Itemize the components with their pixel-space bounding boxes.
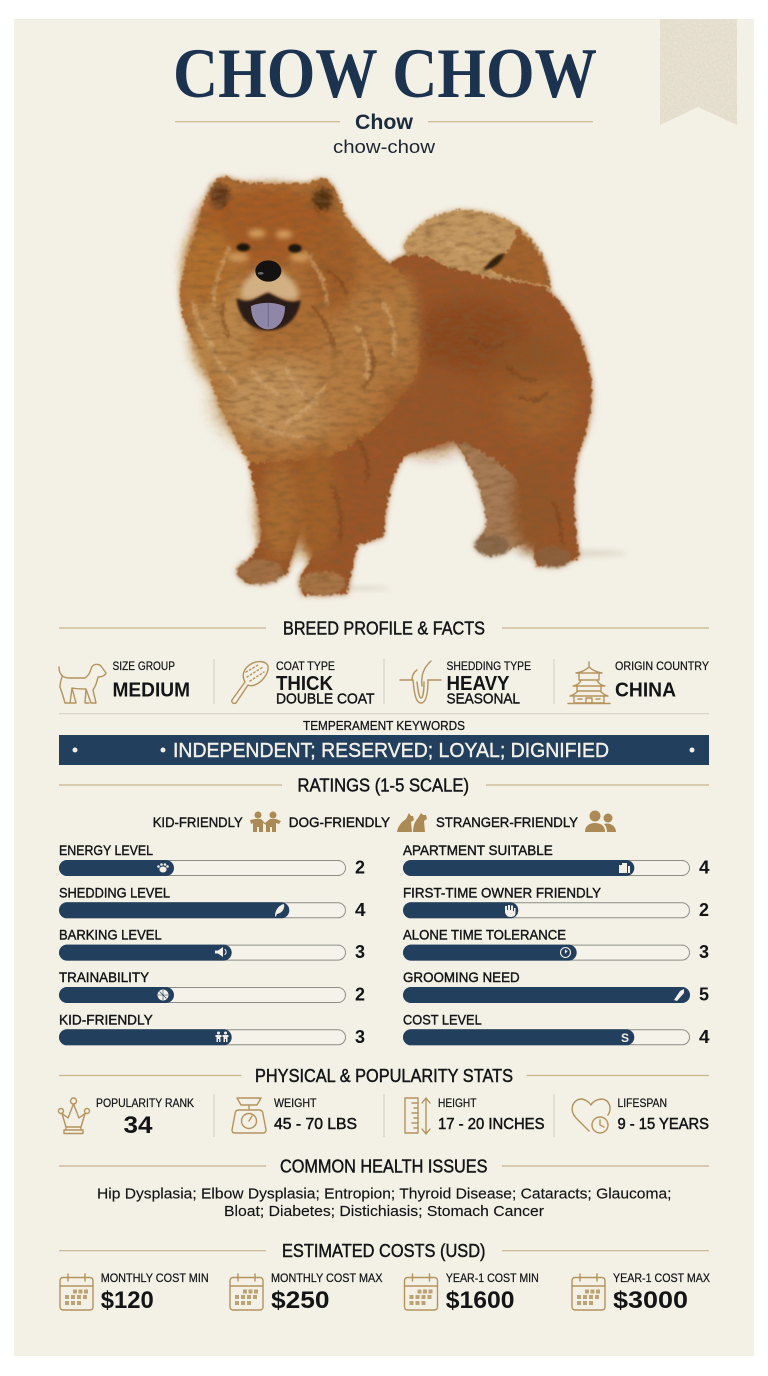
rating: alone time tolerance (403, 927, 709, 962)
rating: grooming need (403, 969, 709, 1004)
rating: alone time tolerance: ALONE TIME TOLERANCE (403, 927, 566, 943)
cost: monthly max: MONTHLY COST MAX (271, 1271, 382, 1285)
rating: cost level: COST LEVEL (403, 1011, 482, 1027)
section heading: health issues: COMMON HEALTH ISSUES (280, 1156, 488, 1176)
icon: heart and clock (572, 1099, 610, 1133)
icon: scale (232, 1098, 266, 1133)
fact: shedding type (400, 659, 531, 708)
cost: year-1 max: YEAR-1 COST MAX (613, 1271, 710, 1285)
ratings legend: KID-FRIENDLY (153, 814, 243, 830)
icon: dog (59, 664, 106, 703)
rating: trainability (59, 969, 365, 1004)
stat: lifespan: 9 - 15 YEARS (618, 1116, 709, 1133)
icon: dogs (397, 813, 427, 832)
cost: monthly max (230, 1271, 382, 1314)
stat: popularity rank: 34 (124, 1112, 153, 1139)
icon: speaker (215, 947, 226, 957)
bookmark ribbon (660, 19, 737, 125)
icon: kids (250, 812, 281, 832)
icon: people (585, 810, 616, 832)
rating: shedding level: 4 (355, 900, 366, 920)
stat: height (405, 1096, 544, 1134)
rating: apartment suitable: 4 (699, 858, 710, 878)
fact: size group (59, 659, 190, 703)
icon: hair follicle (400, 661, 441, 703)
stat: weight: 45 - 70 LBS (274, 1116, 357, 1133)
rating: first-time owner friendly: FIRST-TIME OWNER FRIENDLY (403, 884, 602, 900)
section heading: breed profile: BREED PROFILE & FACTS (283, 618, 485, 638)
cost: monthly max: $250 (271, 1287, 330, 1314)
fact: origin country: ORIGIN COUNTRY (615, 659, 709, 673)
rating: cost level: 4 (699, 1027, 710, 1047)
rating: kid-friendly: 3 (355, 1027, 365, 1047)
icon: kids (216, 1032, 228, 1042)
cost: year-1 min (404, 1271, 539, 1314)
rating: grooming need: GROOMING NEED (403, 969, 520, 985)
stat: height: HEIGHT (438, 1096, 477, 1110)
stat: lifespan (572, 1096, 709, 1133)
rating: barking level: 3 (355, 942, 365, 962)
icon: brain (158, 990, 168, 1000)
icon: crown (58, 1098, 90, 1134)
stat: popularity rank (58, 1096, 194, 1139)
cost: year-1 max (572, 1271, 710, 1314)
dog photo illustration (180, 177, 627, 595)
fact: coat type (232, 659, 375, 708)
stat: lifespan: LIFESPAN (618, 1096, 667, 1110)
rating: kid-friendly: KID-FRIENDLY (59, 1011, 153, 1027)
health issues text: Bloat; Diabetes; Distichiasis; Stomach Cancer (224, 1203, 544, 1220)
rating: shedding level: SHEDDING LEVEL (59, 884, 170, 900)
subtitle: common name: Chow (355, 111, 414, 134)
rating: energy level (59, 842, 365, 878)
temperament banner (59, 735, 709, 765)
icon: dollar: S (621, 1031, 629, 1045)
stat: height: 17 - 20 INCHES (438, 1116, 544, 1133)
rating: barking level: BARKING LEVEL (59, 927, 162, 943)
rating: first-time owner friendly: 2 (699, 900, 709, 920)
rating: cost level (403, 1011, 710, 1047)
fact: shedding type: SEASONAL (446, 692, 520, 708)
icon: feather (275, 904, 284, 917)
stat: weight: WEIGHT (274, 1096, 317, 1110)
rating: apartment suitable: APARTMENT SUITABLE (403, 842, 553, 858)
rating: barking level (59, 927, 365, 962)
rating: apartment suitable (403, 842, 710, 878)
temperament banner: INDEPENDENT; RESERVED; LOYAL; DIGNIFIED (173, 740, 609, 762)
section heading: physical stats: PHYSICAL & POPULARITY STATS (255, 1066, 513, 1086)
rating: trainability: TRAINABILITY (59, 969, 150, 985)
icon: hand (505, 905, 516, 917)
fact: origin country (568, 659, 709, 704)
cost: year-1 min: YEAR-1 COST MIN (446, 1271, 539, 1285)
fact: coat type: THICK (276, 673, 334, 695)
icon: ruler and arrow (405, 1098, 430, 1134)
ratings legend (153, 810, 616, 832)
icon: clock (560, 948, 570, 958)
rating: energy level: ENERGY LEVEL (59, 842, 153, 858)
rating: kid-friendly (59, 1011, 365, 1047)
section heading: ratings: RATINGS (1-5 SCALE) (298, 776, 469, 796)
temperament heading: TEMPERAMENT KEYWORDS (303, 719, 465, 733)
rating: alone time tolerance: 3 (699, 942, 709, 962)
subtitle: slug: chow-chow (333, 137, 436, 157)
stat: popularity rank: POPULARITY RANK (96, 1096, 194, 1110)
rating: shedding level (59, 884, 366, 920)
fact: origin country: CHINA (615, 680, 676, 702)
icon: pagoda (568, 662, 610, 704)
fact: size group: MEDIUM (112, 680, 190, 702)
ratings legend: STRANGER-FRIENDLY (436, 814, 579, 830)
rating: energy level: 2 (355, 858, 365, 878)
health issues text (97, 1186, 672, 1220)
fact: shedding type: HEAVY (446, 673, 510, 695)
ratings legend: DOG-FRIENDLY (289, 814, 391, 830)
cost: year-1 min: $1600 (446, 1287, 514, 1314)
health issues text: Hip Dysplasia; Elbow Dysplasia; Entropion; Thyroid Disease; Cataracts; Glaucoma; (97, 1186, 672, 1202)
cost: year-1 max: $3000 (613, 1287, 688, 1314)
fact: shedding type: SHEDDING TYPE (446, 659, 531, 673)
rating: first-time owner friendly (403, 884, 709, 920)
title: CHOW CHOW (173, 35, 597, 113)
rating: trainability: 2 (355, 984, 365, 1004)
cost: monthly min: MONTHLY COST MIN (101, 1271, 209, 1285)
icon: brush (232, 662, 268, 703)
cost: monthly min (60, 1271, 209, 1314)
icon: comb (674, 989, 684, 1001)
section heading: estimated costs: ESTIMATED COSTS (USD) (282, 1241, 486, 1261)
fact: size group: SIZE GROUP (112, 659, 175, 673)
icon: paw (157, 863, 169, 872)
stat: weight (232, 1096, 357, 1133)
fact: coat type: COAT TYPE (276, 659, 335, 673)
fact: coat type: DOUBLE COAT (276, 692, 375, 708)
rating: grooming need: 5 (699, 984, 709, 1004)
icon: building (619, 863, 630, 873)
cost: monthly min: $120 (101, 1287, 154, 1314)
